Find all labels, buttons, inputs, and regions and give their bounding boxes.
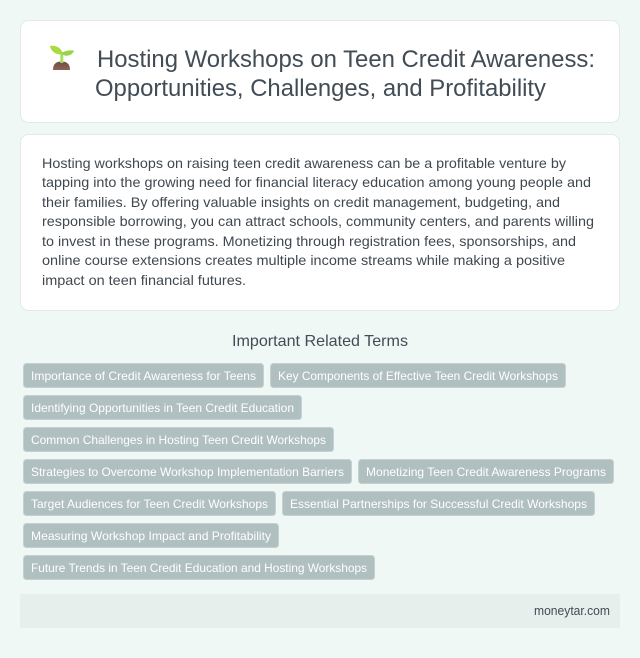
tag: Common Challenges in Hosting Teen Credit Workshops <box>31 433 326 447</box>
title: Hosting Workshops on Teen Credit Awareness: <box>97 46 595 73</box>
tag: Identifying Opportunities in Teen Credit Education <box>31 401 294 415</box>
tag <box>282 492 594 516</box>
tag <box>24 428 334 452</box>
tag <box>24 396 302 420</box>
text block: intro paragraph: to invest in these programs. Monetizing through registration fees, sponsorships, and <box>42 233 576 249</box>
panel: intro text <box>20 134 620 310</box>
text block: intro paragraph <box>42 155 594 288</box>
panel: title card <box>20 20 620 122</box>
text block: intro paragraph: their families. By offering valuable insights on credit management, budgeting, and <box>42 194 560 210</box>
tag <box>24 460 352 484</box>
tag list <box>24 364 614 580</box>
tag <box>358 460 614 484</box>
text block: intro paragraph: Hosting workshops on raising teen credit awareness can be a profitable venture by <box>42 155 566 171</box>
text block: intro paragraph: impact on teen financial futures. <box>42 272 246 288</box>
tag: Target Audiences for Teen Credit Workshops <box>31 497 268 511</box>
tag: Future Trends in Teen Credit Education and Hosting Workshops <box>31 561 367 575</box>
text block: intro paragraph: online course extensions creates multiple income streams while making a positive <box>42 252 565 268</box>
tag <box>24 492 276 516</box>
tag: Essential Partnerships for Successful Credit Workshops <box>290 497 587 511</box>
tag: Strategies to Overcome Workshop Implementation Barriers <box>31 465 344 479</box>
tag <box>24 524 278 548</box>
footer <box>20 594 620 628</box>
text block: intro paragraph: tapping into the growing need for financial literacy education among young people and <box>42 174 591 190</box>
footer: source: moneytar.com <box>534 604 610 618</box>
tag <box>24 556 374 580</box>
tag: Importance of Credit Awareness for Teens <box>31 369 256 383</box>
title <box>95 46 595 102</box>
tag: Measuring Workshop Impact and Profitability <box>31 529 271 543</box>
tag <box>24 364 264 388</box>
tag: Monetizing Teen Credit Awareness Programs <box>366 465 606 479</box>
title: Opportunities, Challenges, and Profitability <box>95 75 546 102</box>
tag: Key Components of Effective Teen Credit Workshops <box>278 369 558 383</box>
icon: seedling <box>50 46 74 70</box>
heading: important related terms: Important Related Terms <box>232 333 408 350</box>
text block: intro paragraph: responsible borrowing, you can attract schools, community centers, and parents willing <box>42 213 594 229</box>
tag <box>270 364 566 388</box>
